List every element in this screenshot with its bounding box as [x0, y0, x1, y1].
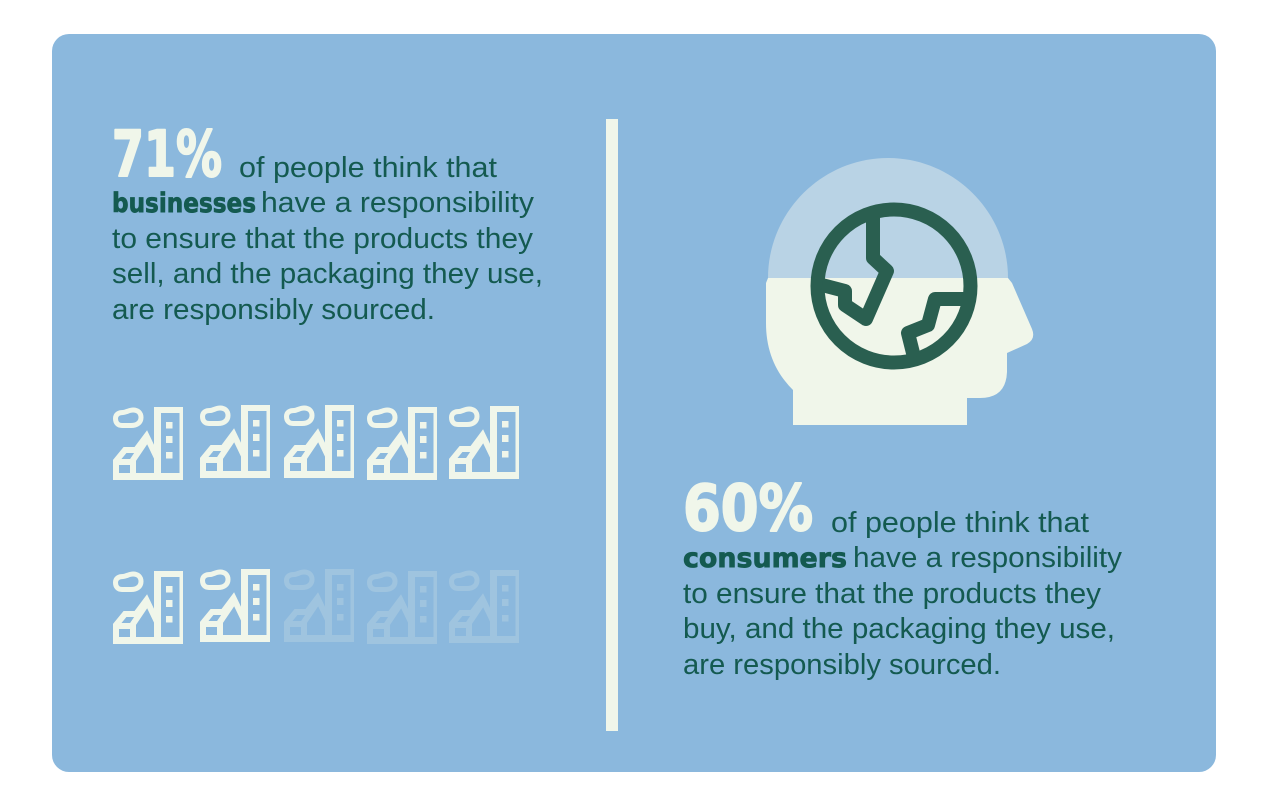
left statement: of people think that: [239, 152, 497, 184]
right statistic text block: [683, 472, 1123, 681]
right statement: consumers: [683, 543, 847, 574]
vertical divider: [606, 119, 618, 731]
right statement: buy, and the packaging they use,: [683, 613, 1115, 645]
right statement: of people think that: [831, 507, 1089, 539]
right statement: have a responsibility: [853, 542, 1123, 574]
pictogram row 1: five building icons: [113, 405, 519, 480]
pictogram row 2: two solid building icons: [113, 569, 270, 644]
left statement: [112, 152, 543, 326]
pictogram row 2: three faded building icons: [284, 569, 519, 644]
left statement: sell, and the packaging they use,: [112, 258, 543, 290]
head lower silhouette: [766, 278, 1033, 425]
left statement: have a responsibility: [261, 187, 535, 219]
left statement: businesses: [112, 188, 256, 219]
icon: head with globe: [766, 158, 1033, 425]
left statement: to ensure that the products they: [112, 223, 534, 255]
right statement: to ensure that the products they: [683, 578, 1102, 610]
left statistic text block: [112, 118, 543, 326]
right statement: [683, 507, 1123, 681]
head top dome: [768, 158, 1008, 278]
left statement: are responsibly sourced.: [112, 294, 435, 326]
globe: [818, 210, 970, 362]
71% figure: 71%: [112, 118, 222, 191]
60% figure: 60%: [683, 472, 813, 545]
right statement: are responsibly sourced.: [683, 649, 1001, 681]
